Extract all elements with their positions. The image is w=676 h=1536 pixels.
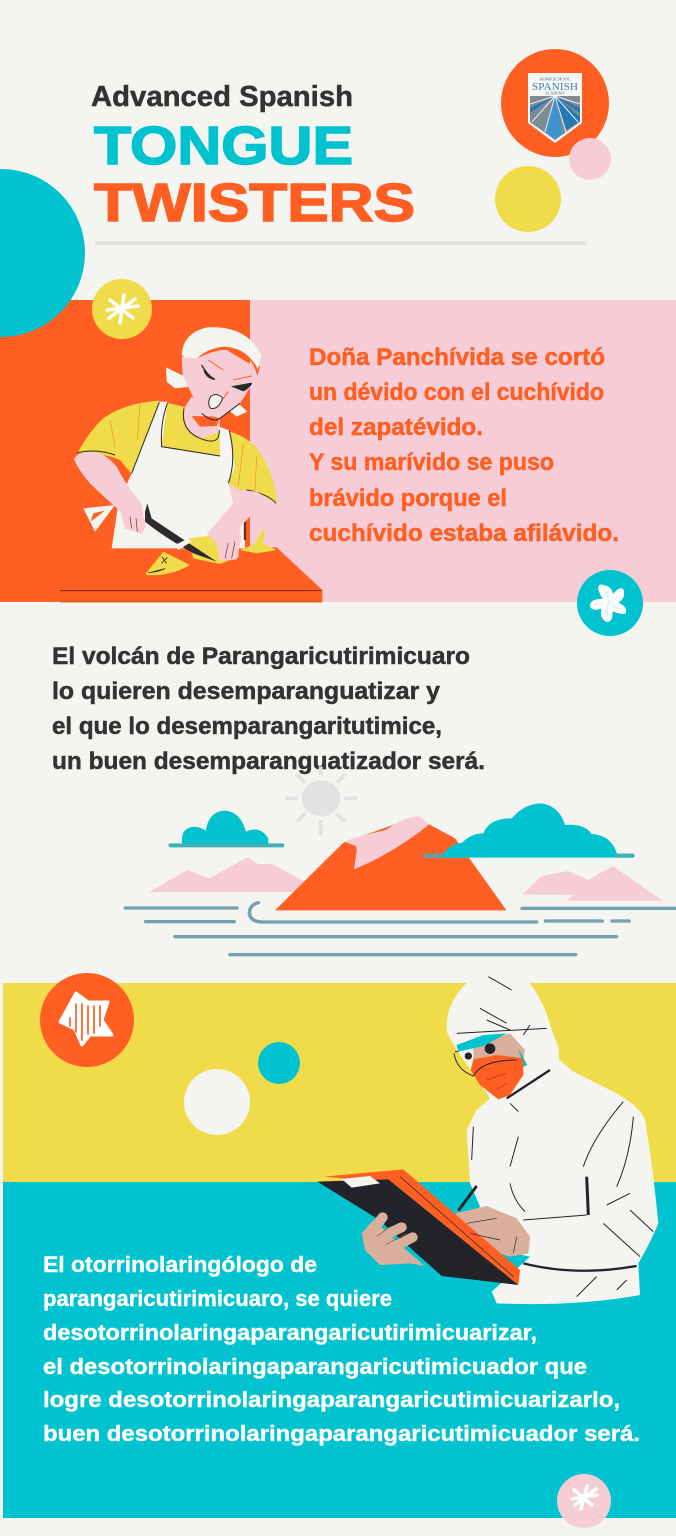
neck (184, 397, 220, 438)
text: volcano tongue twister (52, 643, 485, 775)
hands (123, 503, 242, 561)
icon: shield logo: ACADEMY (545, 90, 565, 96)
text: volcano tongue twister: lo quieren desemparanguatizar y (52, 678, 441, 705)
text: otorrinolaringólogo: buen desotorrinolaringaparangaricutimicuador será. (43, 1421, 640, 1446)
right hand (455, 1206, 530, 1257)
text: volcano tongue twister: un buen desemparanguatizador será. (52, 748, 485, 775)
logo badge (501, 49, 609, 157)
sun (285, 767, 358, 835)
face, mask and goggles (454, 1028, 547, 1099)
text: otorrinolaringólogo: el desotorrinolaringaparangaricutimicuador que (43, 1354, 587, 1379)
text: volcano tongue twister: el que lo desemparangaritutimice, (52, 713, 442, 740)
icon: shield logo: HOMESCHOOL (539, 76, 571, 82)
icon: shield logo (528, 73, 582, 143)
text: volcano tongue twister: El volcán de Parangaricutirimicuaro (52, 643, 470, 670)
text: otorrinolaringólogo: parangaricutirimicuaro, se quiere (43, 1286, 392, 1311)
panel: doctor tongue twister (3, 973, 676, 1518)
pink circle (569, 138, 611, 180)
large cloud (423, 803, 635, 858)
small cloud (169, 811, 284, 847)
cutting board (60, 547, 322, 602)
text: otorrinolaringólogo: logre desotorrinolaringaparangaricutimicuarizarlo, (43, 1387, 620, 1412)
yellow circle (495, 166, 561, 232)
text: Doña Panchívida (309, 344, 619, 547)
knife and fish (145, 503, 238, 575)
pen (458, 1186, 477, 1211)
fingers over clipboard (372, 1217, 517, 1253)
text: Doña Panchívida: un dévido con el cuchívido (309, 379, 604, 406)
protective suit (447, 975, 658, 1304)
text: Doña Panchívida: cuchívido estaba afilávido. (309, 520, 619, 547)
pink hills left (149, 857, 304, 892)
arms (74, 452, 274, 561)
text: otorrinolaringólogo: El otorrinolaringólogo de (43, 1252, 317, 1277)
icon: yellow asterisk badge (92, 279, 152, 339)
icon: teal flower badge (577, 570, 643, 636)
cream circle (184, 1069, 250, 1135)
text: Doña Panchívida: Y su marívido se puso (309, 449, 554, 476)
decorative teal circle (0, 169, 85, 337)
illustration: scientist with clipboard (317, 975, 658, 1304)
icon: pink asterisk badge (557, 1474, 611, 1528)
panel: cook tongue twister (0, 169, 676, 602)
text: otorrinolaringólogo: desotorrinolaringaparangaricutirimicuarizar, (43, 1320, 537, 1345)
text: Doña Panchívida: brávido porque el (309, 485, 507, 512)
icon: shield logo: SPANISH (532, 82, 578, 93)
pink hills right (522, 866, 663, 901)
head (166, 327, 261, 420)
title (91, 81, 415, 233)
text: Doña Panchívida: Doña Panchívida se cortó (309, 344, 605, 371)
title: TWISTERS (94, 173, 415, 233)
title: TONGUE (94, 116, 353, 176)
illustration: volcano landscape (125, 767, 676, 955)
triangle apron tie (83, 505, 115, 532)
text: otorrinolaringólogo (43, 1252, 640, 1446)
text: Doña Panchívida: del zapatévido. (309, 414, 483, 441)
illustration: angry cook cutting a fish (60, 327, 322, 602)
sleeves (77, 401, 277, 505)
title: Advanced Spanish (91, 81, 353, 113)
teal circle (258, 1042, 300, 1084)
volcano (275, 816, 507, 910)
icon: striped star badge (40, 973, 134, 1067)
clipboard (317, 1169, 520, 1285)
water lines (125, 903, 676, 955)
torso apron (112, 402, 247, 548)
fish tail (240, 527, 277, 553)
left hand palm (362, 1220, 425, 1266)
